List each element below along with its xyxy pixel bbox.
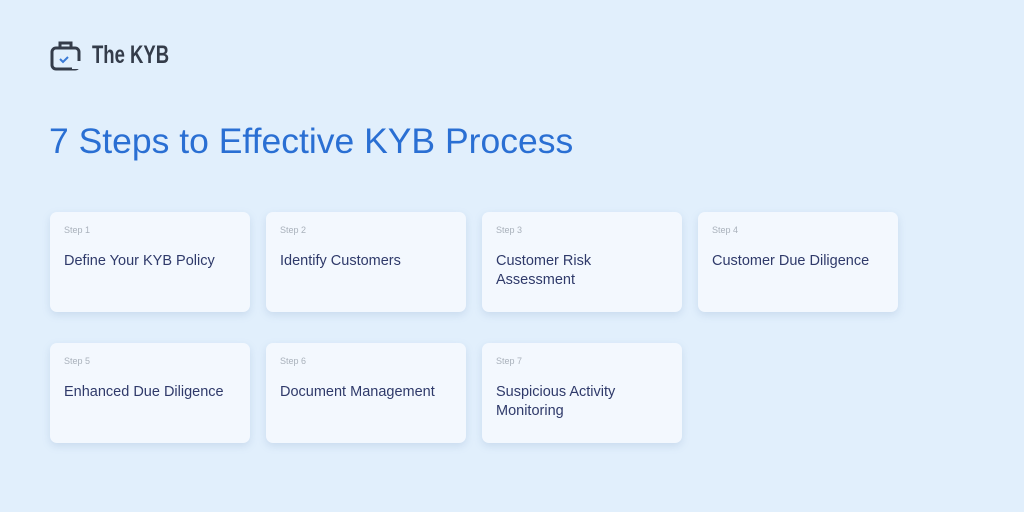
card: step 6: Document Management (280, 384, 435, 400)
logo (50, 41, 169, 70)
card: step 2: Step 2 (280, 225, 306, 235)
card: step 4 (698, 212, 898, 312)
card: step 1: Define Your KYB Policy (64, 253, 215, 269)
card: step 5 (50, 343, 250, 443)
card: step 6: Step 6 (280, 356, 306, 366)
card: step 2 (266, 212, 466, 312)
card: step 1 (50, 212, 250, 312)
card: step 5: Step 5 (64, 356, 90, 366)
card: step 7 (482, 343, 682, 443)
card: step 3 (482, 212, 682, 312)
card: step 4: Step 4 (712, 225, 738, 235)
card: step 6 (266, 343, 466, 443)
card: step 5: Enhanced Due Diligence (64, 384, 224, 400)
card: step 2: Identify Customers (280, 253, 401, 269)
logo text: The KYB (92, 41, 169, 69)
card: step 3: Customer Risk Assessment (496, 253, 591, 288)
card: step 7: Step 7 (496, 356, 522, 366)
card: step 7: Suspicious Activity Monitoring (496, 384, 615, 419)
card: step 1: Step 1 (64, 225, 90, 235)
card: step 3: Step 3 (496, 225, 522, 235)
title: 7 Steps to Effective KYB Process (49, 121, 573, 161)
card: step 4: Customer Due Diligence (712, 253, 869, 269)
icon: briefcase check (50, 42, 80, 70)
